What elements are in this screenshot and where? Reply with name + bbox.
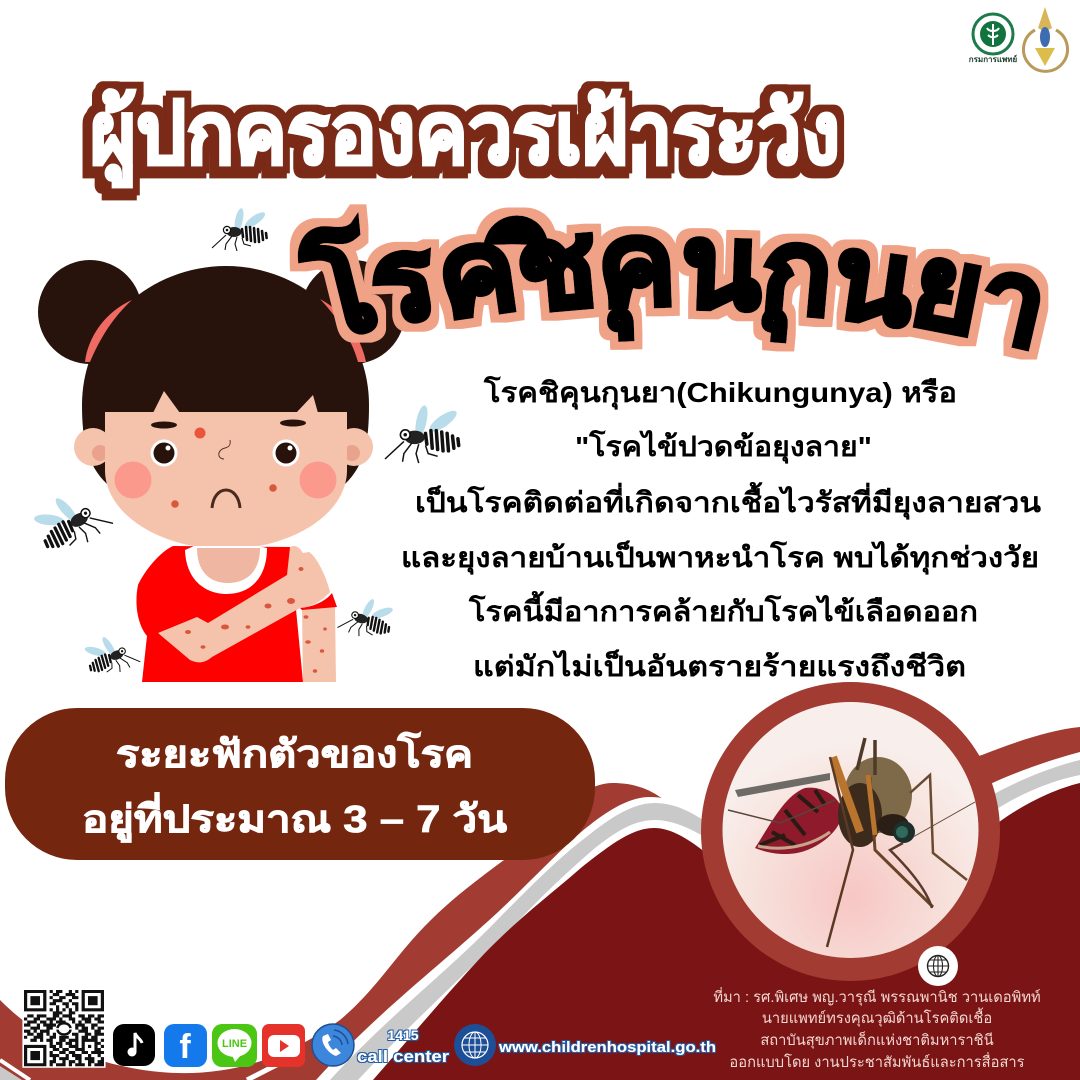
icon: line [212,1024,257,1067]
icon: website globe [454,1024,496,1066]
icon: tiktok [113,1024,155,1066]
QR code [22,988,106,1068]
icon: globe badge [918,946,958,986]
title: chikungunya arched: โรคชิคุนกุนยา [294,197,1060,374]
text block: description: แต่มักไม่เป็นอันตรายร้ายแรงถึงชีวิต [473,649,966,682]
mosquito: top [212,207,267,251]
title: parents should watch: ผู้ปกครองควรเฝ้าระวัง [90,86,840,187]
photo: mosquito biting skin [701,682,1000,981]
logo: department of medical services: กรมการแพทย์ [969,54,1018,64]
label: 1415 call center: 1415 [387,1027,419,1043]
icon: facebook: f [179,1028,191,1066]
callout: incubation period: อยู่ที่ประมาณ 3 – 7 วัน [82,792,507,843]
mosquito: lower left [81,628,141,681]
callout: incubation period [5,708,595,860]
icon: facebook [164,1024,207,1067]
text block: description: เป็นโรคติดต่อที่เกิดจากเชื้อไวรัสที่มียุงลายสวน [415,481,1041,520]
icon: line: LINE [222,1038,247,1050]
source credit: นายแพทย์ทรงคุณวุฒิด้านโรคติดเชื้อ [762,1007,992,1027]
source credit: ที่มา : รศ.พิเศษ พญ.วารุณี พรรณพานิช วานเดอพิทท์ [713,987,1041,1006]
label: 1415 call center: call center [357,1047,449,1066]
label: website: www.childrenhospital.go.th [498,1039,716,1056]
illustration: sick girl [38,260,405,682]
text block: description: "โรคไข้ปวดข้อยุงลาย" [575,429,872,464]
source credit [713,987,1041,1071]
text block: description: และยุงลายบ้านเป็นพาหะนำโรค พบได้ทุกช่วงวัย [401,540,1039,575]
background waves [0,727,1080,1080]
mosquito: lower right [337,592,396,643]
icon: youtube [262,1024,305,1067]
mosquito: left of girl [28,479,115,561]
text block: description [401,375,1041,682]
mosquito: right of girl [385,404,460,463]
source credit: สถาบันสุขภาพเด็กแห่งชาติมหาราชินี [760,1030,994,1049]
logo: department of medical services [969,14,1018,64]
icon: phone [312,1024,354,1066]
text block: description: โรคนี้มีอาการคล้ายกับโรคไข้เลือดออก [468,590,978,627]
callout: incubation period: ระยะฟักตัวของโรค [116,731,473,776]
label: 1415 call center [357,1027,449,1066]
text block: description: โรคชิคุนกุนยา(Chikungunya) หรือ [483,375,957,410]
source credit: ออกแบบโดย งานประชาสัมพันธ์และการสื่อสาร [729,1052,1025,1071]
logo: queen sirikit emblem [1024,7,1068,71]
